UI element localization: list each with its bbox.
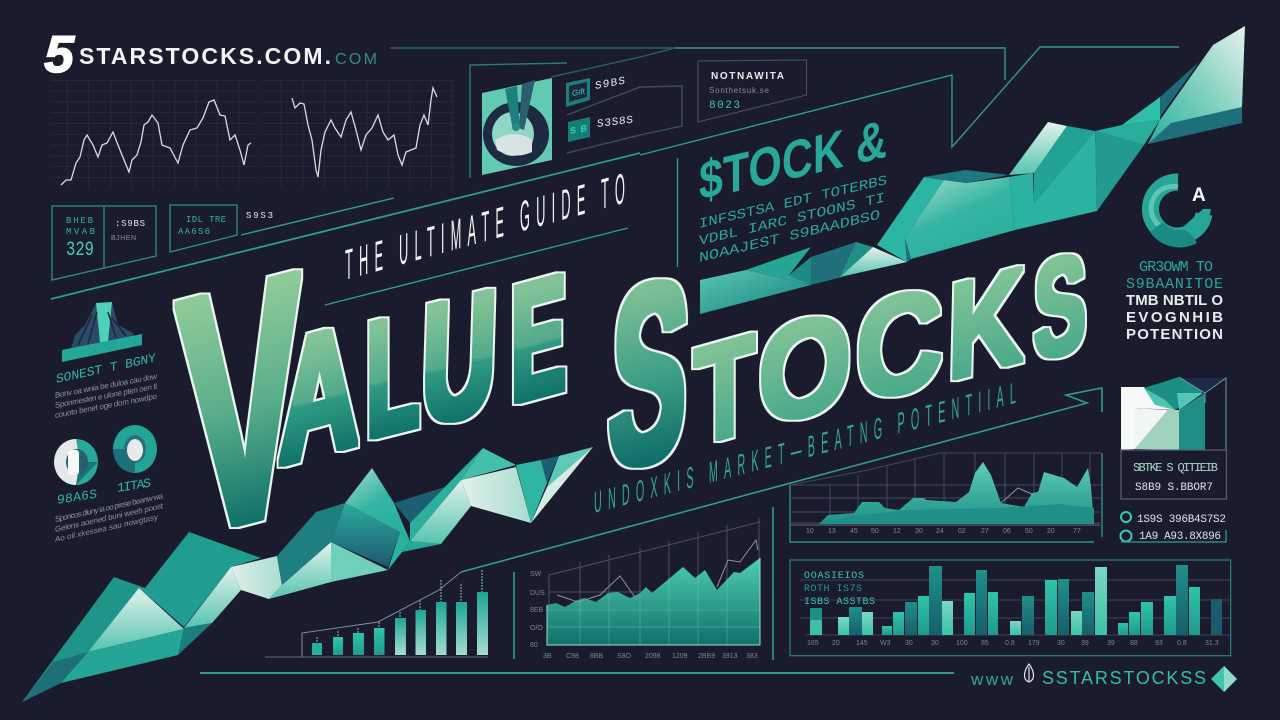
left note 1: SONEST T BGNY (56, 351, 156, 387)
small bar chart (265, 570, 488, 657)
title word: value: V (173, 201, 313, 609)
axis labels: 8EB (530, 607, 544, 614)
axis labels: 3913 (722, 653, 738, 660)
axis labels (807, 640, 1219, 647)
logo suffix: COM (335, 51, 377, 68)
tile caption box (1121, 450, 1226, 499)
axis labels: C98 (566, 653, 579, 660)
logo mark: 5: 5 (44, 25, 75, 84)
axis labels: 30 (905, 640, 913, 647)
left note 1 (55, 351, 158, 420)
stock text block: VDBL IARC STOONS TI (699, 191, 885, 250)
note box: Sonthetsuk.se (709, 86, 770, 95)
axis labels: 93 (1155, 640, 1163, 647)
icon: diamond (1211, 666, 1237, 692)
decorative connecting lines (51, 47, 1179, 673)
legend rows (1120, 512, 1226, 543)
needle (505, 86, 520, 130)
stat box 2 (170, 205, 273, 252)
axis labels: 30 (1057, 640, 1065, 647)
axis labels: 145 (856, 640, 868, 647)
upper right mountain graphic (700, 26, 1245, 314)
title word: stocks (694, 222, 1086, 475)
growth text: POTENTION (1126, 326, 1223, 343)
mini stat icon 2: S3S8S (597, 115, 633, 131)
footer url (970, 664, 1237, 692)
axis labels: 10 (806, 528, 814, 535)
donut icon left (54, 439, 98, 485)
axis labels: 85 (981, 640, 989, 647)
axis labels: 30 (915, 528, 923, 535)
stock text block: INFSSTSA EDT TOTERBS (699, 173, 887, 233)
axis labels: 179 (1028, 640, 1040, 647)
donut labels: 98A6S (57, 487, 97, 508)
stat box 1: BJHEN (111, 235, 136, 242)
axis labels: S8O (617, 653, 632, 660)
axis labels: SW (530, 571, 542, 578)
footer url: SSTARSTOCKSS (1042, 668, 1206, 688)
title word: value: A (278, 287, 360, 502)
left note 1: Bonv oa wnia be duloa cau dow (55, 372, 157, 400)
mini stat icon 1 (566, 76, 625, 107)
axis labels: 20 (832, 640, 840, 647)
square logo tile (1121, 377, 1226, 450)
title word: value: S (604, 223, 694, 525)
axis labels: 24 (936, 528, 944, 535)
axis labels: 8BB (590, 653, 604, 660)
right area chart (790, 453, 1102, 542)
heading: stock and: $TOCK & (699, 109, 887, 213)
stock text block (699, 173, 887, 267)
axis labels: 27 (981, 528, 989, 535)
growth text: TMB NBTIL O (1126, 292, 1223, 309)
stat box 2: S9S3 (246, 211, 273, 221)
title word: value (173, 201, 694, 609)
axis labels: 50 (871, 528, 879, 535)
chart heading: ROTH IS7S (804, 584, 862, 595)
line chart right (261, 80, 453, 188)
chart heading: OOASIEIOS (804, 571, 864, 582)
axis labels: 165 (807, 640, 819, 647)
title word: stocks: K (947, 237, 1025, 409)
title word: stocks: C (856, 256, 942, 433)
stat box 1: BHEB (66, 216, 94, 226)
axis labels: 100 (956, 640, 968, 647)
footer url: www (970, 670, 1014, 689)
chart heading: ISBS ASSTBS (804, 597, 875, 608)
donut labels (57, 476, 151, 508)
legend icon 2 (1120, 530, 1132, 542)
axis labels: 31.3 (1205, 640, 1219, 647)
axis labels: 3B (543, 653, 552, 660)
axis labels: 13 (828, 528, 836, 535)
axis labels (806, 528, 1081, 535)
bar chart panel (790, 560, 1231, 656)
axis labels: 45 (850, 528, 858, 535)
logo wordmark: STARSTOCKS.COM. (79, 43, 331, 69)
note box: NOTNAWITA (711, 71, 784, 82)
axis labels: 1209 (672, 653, 688, 660)
stat box 1: MVAB (66, 227, 96, 237)
axis labels: 02 (958, 528, 966, 535)
axis labels: 30 (931, 640, 939, 647)
growth icon (1150, 182, 1211, 247)
title word: value: L (366, 277, 419, 473)
growth text: S9BAANITOE (1126, 276, 1223, 293)
axis labels: 383 (746, 653, 758, 660)
axis labels: O/O (530, 625, 543, 632)
icon: leaf (1024, 664, 1034, 682)
axis labels: 06 (1003, 528, 1011, 535)
left note 2: Gelens aoened buni weeh poost (55, 501, 164, 534)
stat box 1 (52, 206, 156, 280)
mini stat icon 1: S9BS (595, 76, 625, 93)
left note 1: couoto benet oge dom nowdpo (55, 392, 158, 420)
logo (44, 25, 377, 84)
axis labels: 88 (1130, 640, 1138, 647)
stock text block: NOAAJEST S9BAADBSO (699, 208, 880, 267)
axis labels (530, 571, 758, 660)
stat box 1: 329 (66, 239, 94, 262)
title word: stocks: S (1034, 222, 1086, 392)
dial (483, 102, 549, 166)
title word: stocks: O (758, 280, 852, 456)
tile caption box: S8B9 S.BBOR7 (1135, 482, 1213, 494)
axis labels: 0.8 (1177, 640, 1187, 647)
subtitle: UNDOXKIS MARKET—BEATNG POTENTIIAL (594, 376, 1016, 520)
donut icon right (113, 425, 157, 473)
legend icon 1 (1121, 512, 1131, 522)
axis labels: W3 (880, 640, 891, 647)
axis labels: 20 (1047, 528, 1055, 535)
icon: fan (62, 302, 142, 362)
stat box 1: :S9BS (115, 219, 145, 229)
axis labels: 80 (530, 642, 538, 649)
main title: value stocks (173, 201, 1086, 609)
title word: value: U (420, 255, 499, 464)
gauge icon panel (482, 78, 552, 175)
note box (698, 60, 806, 122)
center area chart (530, 518, 760, 660)
left note 2: Ao oil xkessea sau nowgtasy (55, 512, 159, 544)
legend rows: 1A9 A93.8X896 (1139, 531, 1221, 543)
mini stat icon 1: Gift (572, 87, 586, 98)
growth text: EVOGNHIB (1126, 309, 1223, 326)
axis labels: 12 (893, 528, 901, 535)
stat box 2: AA6S6 (178, 227, 210, 237)
stat box 2: IDL TRE (186, 215, 226, 225)
icon letter: A (1192, 185, 1206, 206)
legend rows: 1S9S 396B4S7S2 (1137, 514, 1226, 526)
line chart left (51, 80, 255, 188)
axis labels: 39 (1107, 640, 1115, 647)
mini stat icon 2: SB (570, 123, 587, 136)
left note 1: Sponmesten e ulone pten oen tl (55, 382, 157, 410)
icon tile (482, 78, 552, 175)
left note 2: Sponcos diuny ia oo prese beanw wa (55, 491, 163, 524)
title word: stocks: T (694, 305, 755, 475)
lower left mountain graphic (22, 447, 593, 702)
axis labels: 2BB9 (698, 653, 715, 660)
title word: value: E (512, 239, 566, 438)
axis labels: 2098 (645, 653, 661, 660)
chart heading (804, 571, 875, 608)
axis labels: 39 (1081, 640, 1089, 647)
growth text: GR3OWM TO (1139, 259, 1213, 276)
eyebrow: the ultimate guide to: THE ULTIMATE GUIDE TO (345, 163, 625, 289)
axis labels: DUS (530, 590, 545, 597)
growth text (1126, 259, 1223, 343)
tile caption box: SBTKE S QITIEIB (1133, 461, 1218, 475)
donut labels: 1ITAS (117, 476, 151, 496)
note box: 8023 (709, 100, 740, 112)
axis labels: 77 (1073, 528, 1081, 535)
axis labels: 0.8 (1005, 640, 1015, 647)
left note 2 (55, 491, 164, 544)
axis labels: 50 (1025, 528, 1033, 535)
mini stat icon 2 (568, 115, 633, 142)
